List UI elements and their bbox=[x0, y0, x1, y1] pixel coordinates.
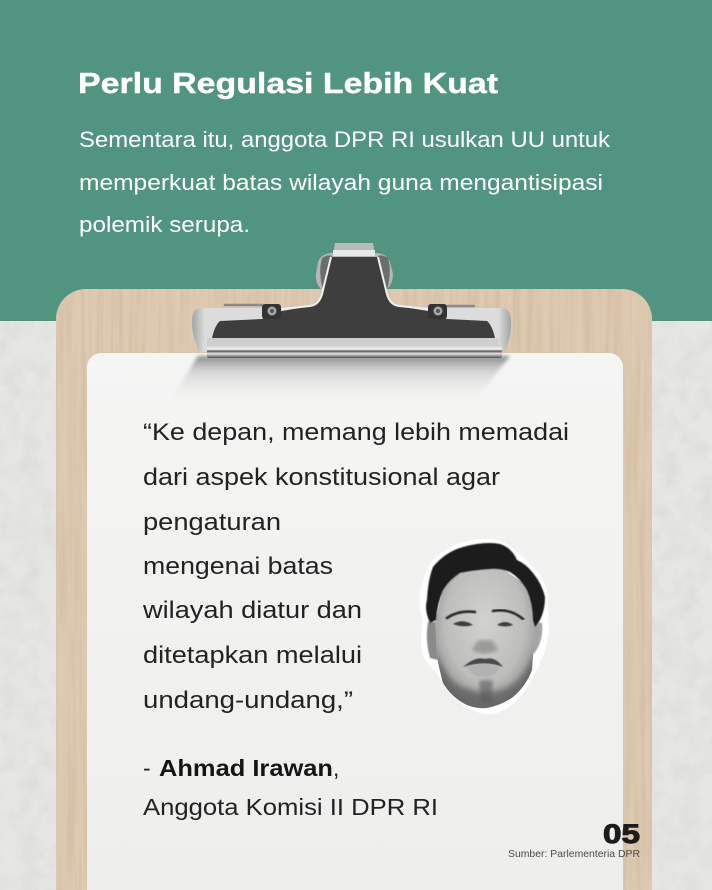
clip dark body bbox=[212, 257, 495, 338]
source note: Sumber: Parlementeria DPR bbox=[508, 848, 640, 860]
left ear bbox=[427, 622, 438, 660]
face bbox=[435, 560, 535, 708]
right screw bbox=[428, 304, 447, 319]
quote text: dari aspek konstitusional agar bbox=[143, 464, 500, 491]
quote text: “Ke depan, memang lebih memadai bbox=[143, 419, 569, 446]
clip rod bbox=[207, 345, 502, 358]
quote text bbox=[142, 419, 569, 714]
attribution: Ahmad Irawan bbox=[159, 755, 333, 781]
clip side wings bbox=[192, 308, 511, 352]
attribution: , bbox=[333, 755, 339, 781]
quote text: ditetapkan melalui bbox=[143, 642, 362, 669]
clipboard wooden board bbox=[56, 289, 652, 890]
intro paragraph: memperkuat batas wilayah guna mengantisipasi bbox=[79, 170, 603, 195]
goatee bbox=[479, 680, 493, 703]
quote text: wilayah diatur dan bbox=[142, 597, 362, 624]
eyes bbox=[453, 621, 513, 626]
paper sheet bbox=[87, 353, 623, 890]
clip top hinge bbox=[316, 243, 393, 296]
wire spring arms bbox=[225, 305, 474, 306]
nose bbox=[472, 640, 498, 654]
clip lower plate bbox=[207, 338, 498, 346]
green header band bbox=[0, 0, 712, 321]
lips bbox=[467, 664, 500, 677]
attribution bbox=[143, 755, 438, 820]
attribution: Anggota Komisi II DPR RI bbox=[143, 794, 438, 820]
quote text: undang-undang,” bbox=[143, 687, 353, 714]
intro paragraph bbox=[79, 127, 611, 237]
quote text: mengenai batas bbox=[143, 553, 333, 580]
clip shadow on paper bbox=[168, 356, 510, 404]
clip chrome edge bbox=[282, 257, 428, 309]
moustache bbox=[463, 658, 503, 667]
title: Perlu Regulasi Lebih Kuat bbox=[78, 68, 499, 100]
sticker outline bbox=[419, 539, 549, 714]
quote text: pengaturan bbox=[143, 509, 281, 536]
intro paragraph: Sementara itu, anggota DPR RI usulkan UU untuk bbox=[79, 127, 611, 152]
left screw bbox=[262, 304, 281, 319]
background: concrete wall bbox=[0, 320, 712, 890]
attribution: - bbox=[143, 755, 151, 781]
metal clip bbox=[192, 243, 511, 358]
stubble and jaw shading bbox=[437, 652, 533, 708]
eyebrows bbox=[447, 610, 523, 619]
hair bbox=[426, 543, 545, 627]
right ear bbox=[531, 622, 542, 654]
portrait sticker bbox=[419, 539, 549, 714]
intro paragraph: polemik serupa. bbox=[79, 212, 250, 237]
page number: 05 bbox=[603, 819, 640, 849]
